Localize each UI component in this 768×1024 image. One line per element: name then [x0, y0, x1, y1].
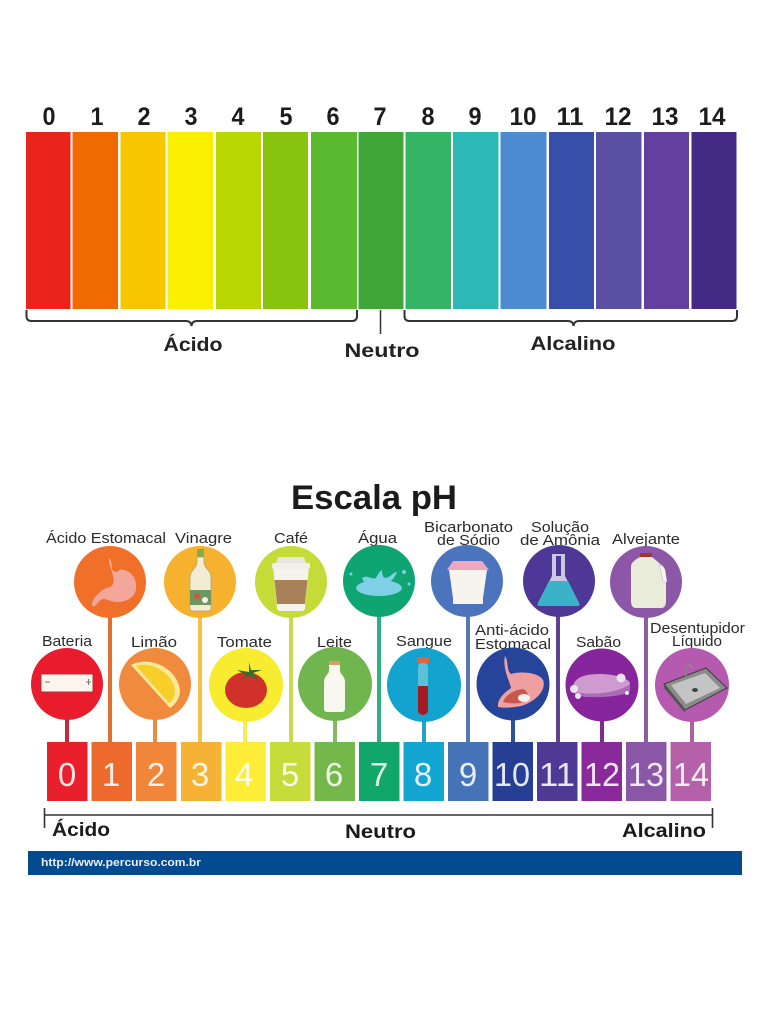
label: Café [274, 531, 308, 547]
axis label: Neutro: Neutro [345, 822, 416, 843]
label: Estomacal [475, 637, 551, 653]
label: Tomate [217, 635, 272, 651]
item: Bateria [31, 634, 103, 720]
icon: battery [41, 674, 93, 692]
pH number boxes: 0 [58, 756, 76, 793]
circle [255, 546, 327, 618]
footer band [28, 851, 742, 875]
pH number boxes: 13 [628, 756, 664, 793]
icon: stomach with tablet [498, 656, 544, 708]
circle [476, 648, 550, 720]
top scale numbers: 13 [652, 103, 678, 131]
label: Leite [317, 635, 352, 651]
top scale numbers: 8 [422, 103, 435, 131]
label: Anti-ácido [475, 623, 549, 639]
top scale numbers [42, 103, 726, 131]
icon: milk bottle [324, 661, 345, 712]
label: Sabão [576, 635, 621, 651]
item: Desentupidor Líquido [650, 621, 745, 722]
item: Anti-ácido Estomacal [475, 623, 551, 720]
label: de Sódio [437, 533, 500, 549]
icon: soap [570, 674, 630, 699]
top scale numbers: 12 [604, 103, 632, 131]
pH number boxes: 5 [281, 756, 299, 793]
circle [31, 648, 103, 720]
pH number boxes: 14 [673, 756, 709, 793]
label: Solução [531, 520, 589, 536]
label [475, 623, 551, 653]
top scale numbers: 4 [232, 103, 245, 131]
top scale numbers: 0 [42, 103, 56, 131]
label: Neutro: Neutro [344, 341, 420, 362]
pH number boxes: 2 [147, 756, 165, 793]
icon: flask [538, 554, 579, 606]
pH number boxes [47, 742, 711, 801]
item: Sabão [566, 635, 638, 722]
pH number boxes: 6 [325, 756, 343, 793]
circle [298, 647, 372, 721]
item: Ácido Estomacal [46, 530, 166, 618]
item: Solução de Amônia [520, 520, 601, 617]
circle [387, 648, 461, 722]
label [424, 520, 513, 549]
bracket: acid range [26, 310, 357, 326]
icon: vinegar bottle [190, 549, 211, 611]
label: Líquido [672, 634, 722, 650]
axis line [44, 808, 712, 828]
axis label: Ácido: Ácido [52, 819, 110, 841]
top scale numbers: 5 [280, 103, 293, 131]
circle [431, 545, 503, 617]
label: Limão [131, 635, 177, 651]
top scale numbers: 6 [326, 103, 340, 131]
label: Alcalino: Alcalino [530, 334, 616, 355]
top scale numbers: 2 [138, 103, 150, 131]
icon: container [447, 561, 489, 604]
label: Desentupidor [650, 621, 745, 637]
label: de Amônia [520, 533, 601, 549]
axis label: Alcalino: Alcalino [622, 821, 706, 842]
label: Ácido: Ácido [164, 334, 222, 356]
icon: sink [664, 665, 727, 713]
item: Leite [298, 635, 372, 721]
label: Água [358, 530, 398, 547]
icon: bleach jug [631, 553, 667, 608]
label [520, 520, 601, 549]
pH number boxes: 4 [235, 756, 253, 793]
top colour bars [26, 132, 736, 309]
circle [74, 546, 146, 618]
top scale numbers: 11 [556, 103, 584, 131]
footer url: http://www.percurso.com.br [41, 857, 202, 869]
pH number boxes: 10 [494, 756, 530, 793]
bracket: alkaline range [404, 310, 737, 326]
circle [655, 648, 729, 722]
item: Bicarbonato de Sódio [424, 520, 513, 617]
circle [119, 648, 191, 720]
icon: lemon slice [131, 662, 180, 708]
pH number boxes: 3 [191, 756, 209, 793]
icon: stomach [92, 558, 136, 606]
circle [566, 648, 638, 722]
label: Bicarbonato [424, 520, 513, 536]
label: Ácido Estomacal [46, 530, 166, 547]
pH number boxes: 8 [414, 756, 432, 793]
icon: coffee cup [272, 557, 310, 611]
circle [209, 648, 283, 722]
circle [523, 545, 595, 617]
item: Alvejante [610, 532, 682, 618]
top pH scale chart [26, 103, 737, 362]
icon: tomato [225, 662, 267, 708]
icon: blood tube [417, 657, 429, 715]
circle [343, 545, 415, 617]
title: Escala pH [291, 479, 457, 517]
label: Bateria [42, 634, 93, 650]
item: Vinagre [164, 531, 236, 618]
pH number boxes: 7 [370, 756, 388, 793]
item: Sangue [387, 634, 461, 722]
top scale numbers: 9 [468, 103, 482, 131]
top scale numbers: 14 [698, 103, 726, 131]
item: Café [255, 531, 327, 618]
circle [610, 546, 682, 618]
label [650, 621, 745, 650]
top scale numbers: 7 [374, 103, 386, 131]
label: Alvejante [612, 532, 680, 548]
label: Sangue [396, 634, 452, 650]
item: Água [343, 530, 415, 617]
pH number boxes: 1 [102, 756, 120, 793]
top scale numbers: 1 [90, 103, 104, 131]
circle [164, 546, 236, 618]
pH number boxes: 12 [584, 756, 620, 793]
label: Vinagre [175, 531, 232, 547]
item: Limão [119, 635, 191, 720]
neutral marker line [380, 310, 382, 334]
top scale numbers: 3 [184, 103, 198, 131]
icon: water splash [350, 570, 410, 596]
pH number boxes: 11 [539, 756, 575, 793]
item: Tomate [209, 635, 283, 722]
stems connecting circles to boxes [67, 615, 692, 743]
pH number boxes: 9 [459, 756, 477, 793]
top scale numbers: 10 [510, 103, 536, 131]
